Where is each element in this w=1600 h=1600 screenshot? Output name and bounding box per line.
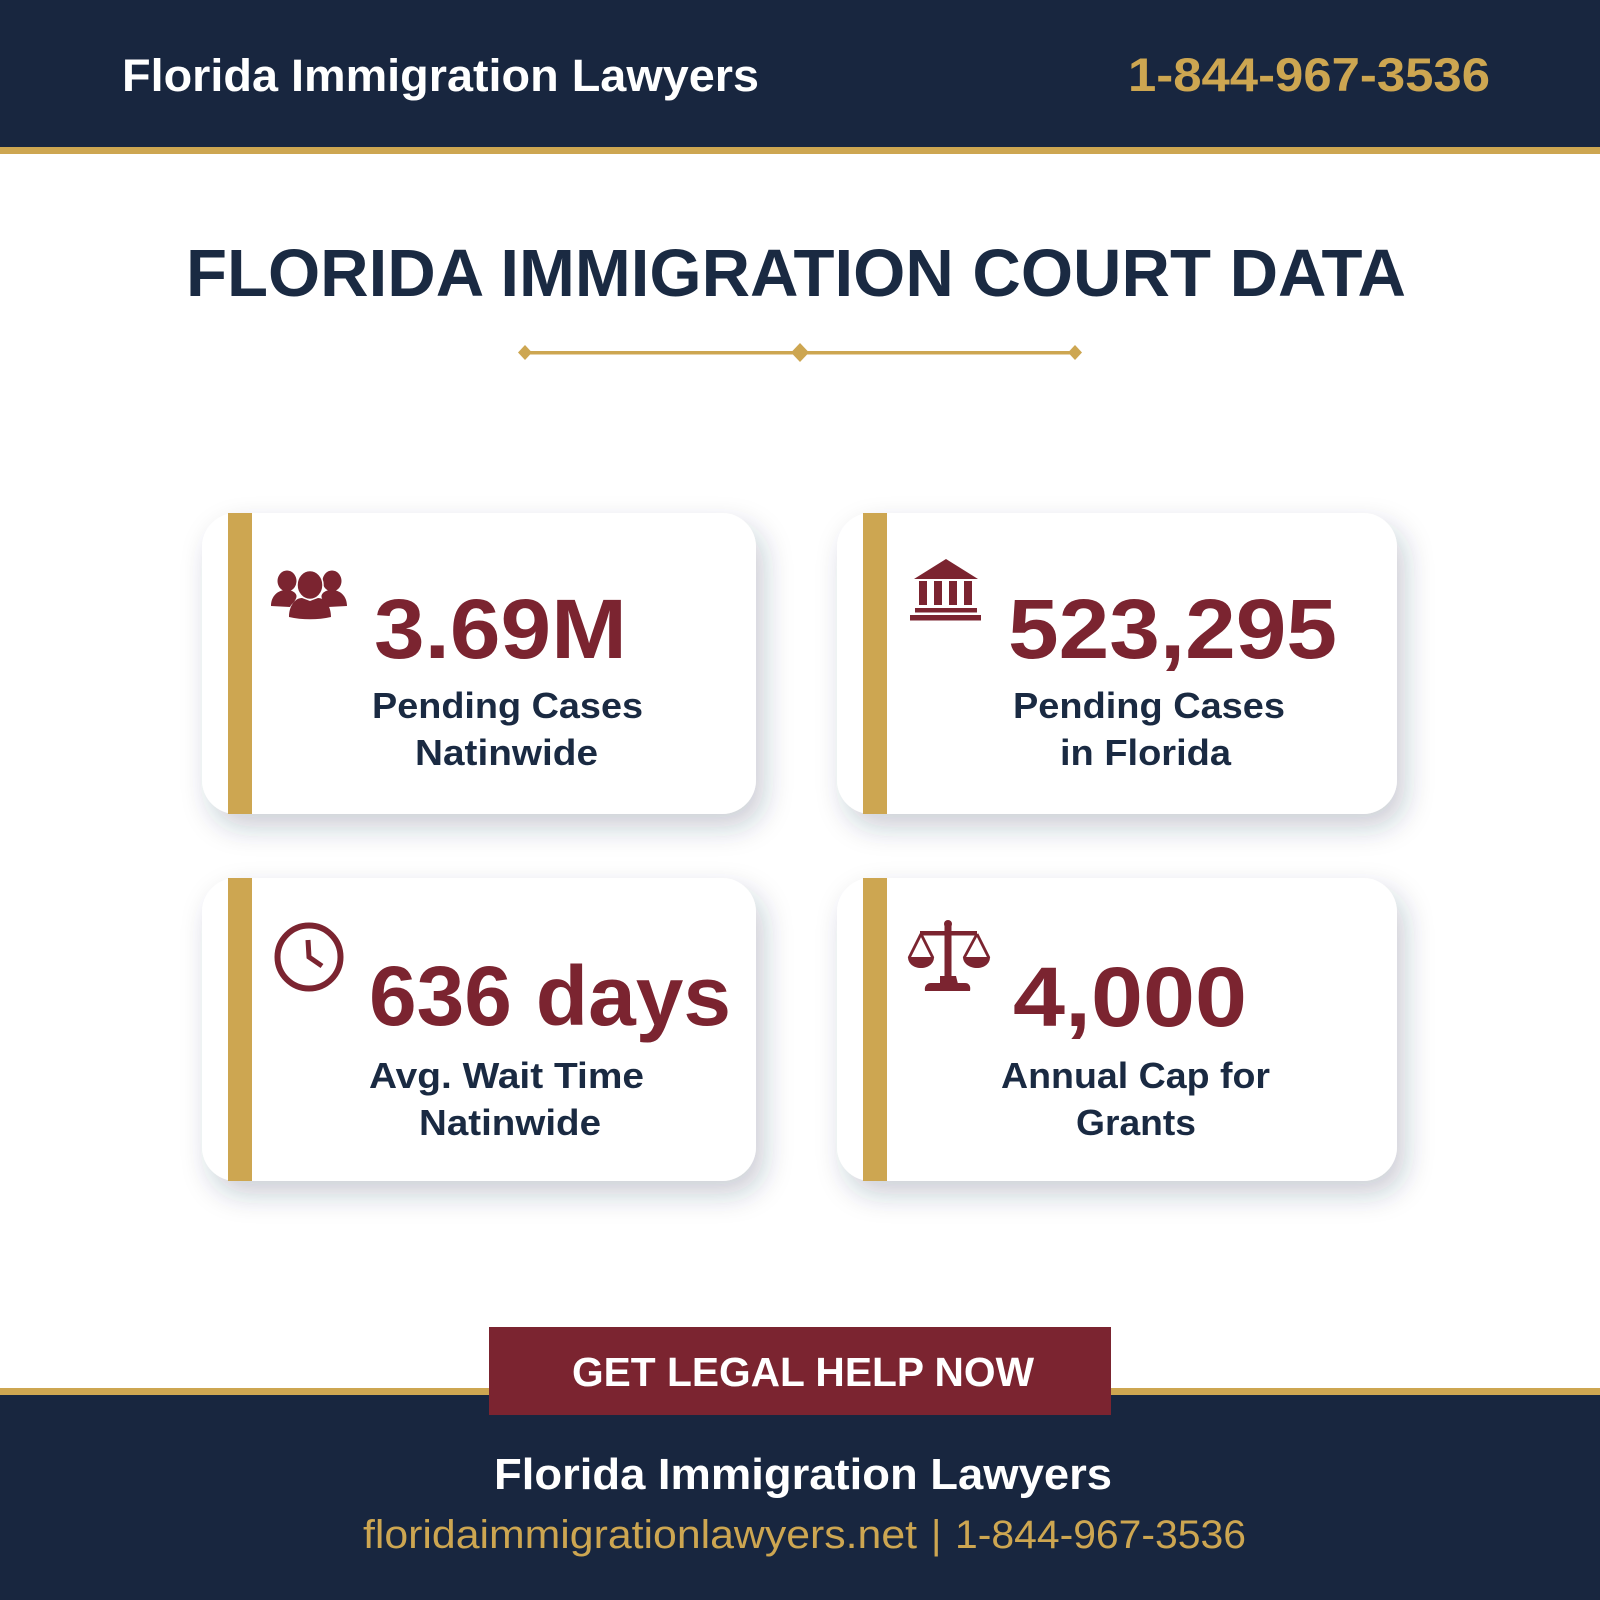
icon: courthouse: [910, 559, 981, 620]
call to action button: [489, 1327, 1111, 1415]
footer website and phone: [363, 1513, 1246, 1557]
stat value: 523,295: [1008, 582, 1337, 676]
icon: clock: [278, 926, 340, 988]
footer website and phone: floridaimmigrationlawyers.net: [363, 1513, 917, 1557]
stat label: [1013, 685, 1285, 773]
stat value: 4,000: [1013, 950, 1247, 1044]
title divider with diamonds: [518, 343, 1082, 362]
footer firm name: Florida Immigration Lawyers: [494, 1450, 1112, 1499]
stat label: in Florida: [1060, 732, 1232, 773]
icon: group of people: [271, 570, 347, 619]
header bar: [0, 0, 1600, 154]
stat label: Natinwide: [415, 732, 598, 773]
title: FLORIDA IMMIGRATION COURT DATA: [186, 236, 1406, 311]
header firm name: Florida Immigration Lawyers: [122, 50, 759, 101]
panel: average wait time: [202, 878, 756, 1181]
stat label: Pending Cases: [1013, 685, 1285, 726]
stat value: 3.69M: [374, 582, 627, 676]
header phone number: 1-844-967-3536: [1128, 48, 1490, 101]
panel: pending cases nationwide: [202, 513, 756, 814]
footer website and phone: 1-844-967-3536: [955, 1513, 1246, 1557]
panel: pending cases in Florida: [837, 513, 1397, 814]
stat label: Natinwide: [419, 1102, 601, 1143]
panel: annual cap for grants: [837, 878, 1397, 1181]
stat label: Pending Cases: [372, 685, 643, 726]
stat label: [1001, 1055, 1270, 1143]
footer bar: [0, 1388, 1600, 1600]
call to action button: GET LEGAL HELP NOW: [572, 1349, 1034, 1395]
stat label: [372, 685, 643, 773]
stat label: [369, 1055, 644, 1143]
stat label: Avg. Wait Time: [369, 1055, 644, 1096]
stat label: Annual Cap for: [1001, 1055, 1270, 1096]
icon: scales of justice: [908, 920, 990, 991]
footer website and phone: |: [931, 1513, 941, 1557]
stat value: 636 days: [369, 949, 731, 1043]
stat label: Grants: [1076, 1102, 1196, 1143]
